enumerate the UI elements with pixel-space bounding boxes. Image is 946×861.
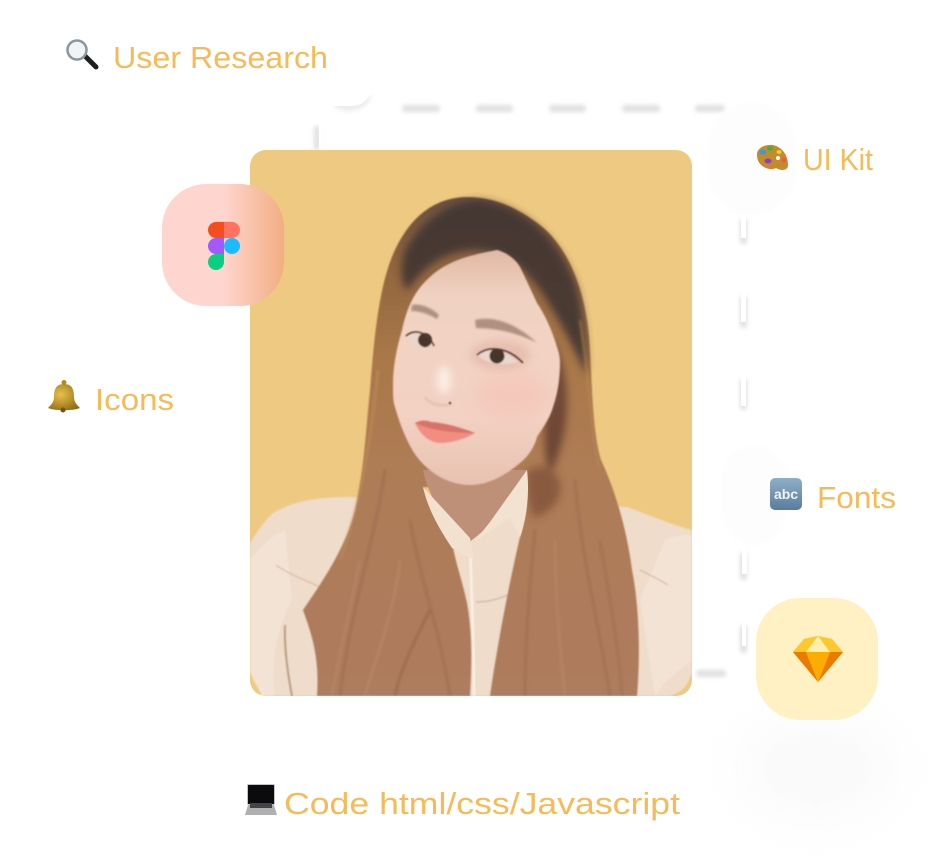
label: icons: Icons	[95, 382, 174, 417]
cheek blush	[495, 384, 529, 391]
eyes	[406, 332, 530, 370]
label: fonts	[770, 478, 896, 515]
icon: laptop	[245, 784, 277, 815]
label: user research: User Research	[113, 40, 328, 75]
faint blobs	[300, 60, 796, 545]
label: code: Code html/css/Javascript	[284, 786, 680, 821]
eyebrows	[411, 305, 537, 343]
portrait photo card	[250, 150, 692, 696]
icon: artist palette	[757, 145, 788, 170]
shirt	[250, 497, 692, 696]
sketch tile	[756, 598, 878, 720]
icon: sketch diamond	[793, 636, 843, 682]
icon: magnifying glass	[68, 40, 96, 67]
label: icons	[48, 380, 174, 417]
hair	[303, 197, 639, 696]
label: ui kit: UI Kit	[803, 142, 873, 177]
label: ui kit	[757, 142, 873, 177]
icon: bell	[48, 380, 80, 412]
collar	[423, 470, 528, 560]
neck	[423, 470, 527, 543]
dashed decorative frame	[300, 60, 895, 814]
nose	[425, 366, 452, 405]
face	[393, 250, 560, 485]
dark hair crown	[402, 200, 587, 375]
lips	[415, 421, 475, 443]
figma tile	[162, 184, 284, 306]
label: fonts: Fonts	[817, 480, 896, 515]
icon: figma logo	[208, 222, 240, 270]
icon: abc tile: abc	[774, 486, 798, 502]
